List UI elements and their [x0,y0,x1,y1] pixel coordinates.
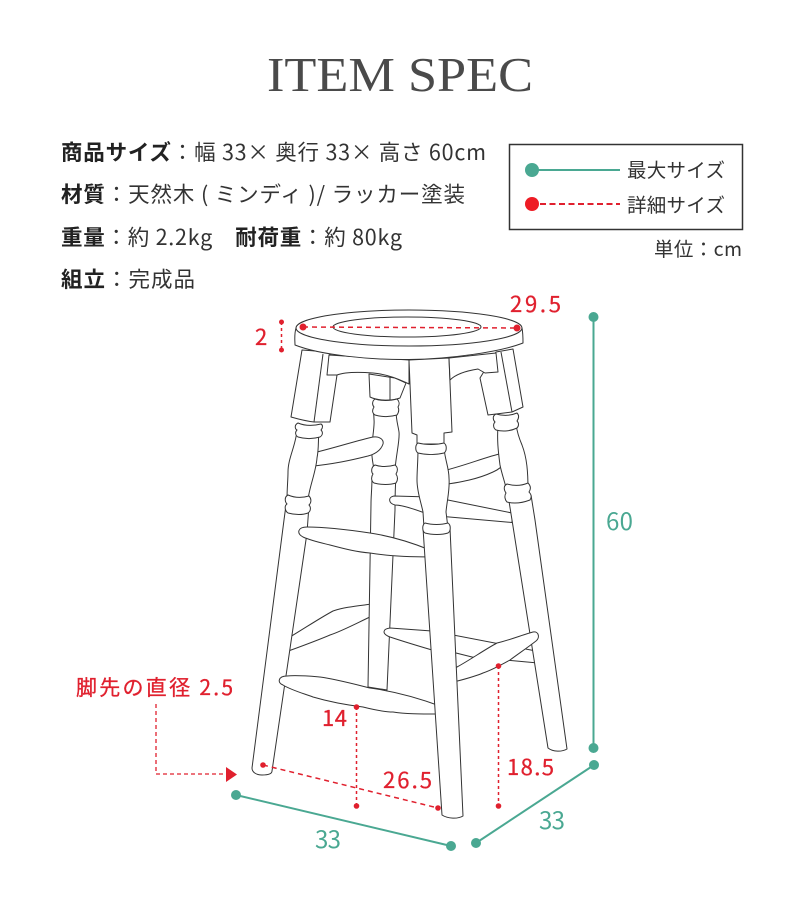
spec: assembly: 組立：完成品 [61,263,195,294]
red detail: lower front stretcher height [322,701,359,809]
apron right [449,353,498,380]
legend: detail size [525,189,725,218]
stool line drawing [252,310,567,818]
rear leg [368,374,406,690]
red detail: seat diameter: 29.5 [510,287,561,319]
back stretcher lower right [448,634,538,663]
unit note: 単位：cm [654,233,742,262]
red detail: seat diameter [300,287,561,332]
green max dimension: height [588,312,633,753]
legend box [510,144,742,230]
green max dimension: width [231,790,456,855]
legend: max size [525,154,725,183]
red detail: leg spacing: 26.5 [383,763,432,795]
left stretcher upper [305,437,383,467]
front centre leg rings [416,443,446,454]
red detail: leg spacing [260,762,441,811]
apron left [327,355,409,384]
red detail: right stretcher height [496,663,554,809]
spec: material: 材質：天然木 ( ミンディ )/ ラッカー塗装 [61,178,465,209]
front-left leg [252,350,337,775]
front stretcher mid [299,527,430,557]
inner stretcher upper [390,496,430,515]
left stretcher lower [283,604,372,653]
inner stretcher lower [384,628,432,650]
legend: max size: 最大サイズ [627,154,725,183]
spec: weight and load: 重量：約 2.2kg 耐荷重：約 80kg [61,221,402,252]
red detail: foot diameter callout: 脚先の直径 2.5 [76,672,233,702]
right leg [480,349,567,751]
red detail: lower front stretcher height: 14 [322,701,347,733]
red detail: right stretcher height: 18.5 [507,750,554,782]
spec text block [61,136,486,294]
right stretcher lower [450,632,538,683]
green max dimension: height: 60 [606,502,633,537]
green max dimension: depth [471,760,599,848]
front-left leg rings [295,423,322,438]
back stretcher upper right [438,498,512,522]
rear leg rings [372,465,398,484]
legend: detail size: 詳細サイズ [627,189,725,218]
stool seat [295,310,523,360]
red detail: seat thickness: 2 [255,320,267,352]
red detail: foot diameter callout [76,672,237,782]
green max dimension: depth: 33 [539,801,565,836]
right leg rings [493,413,518,431]
green max dimension: width: 33 [315,820,341,855]
right stretcher upper [435,453,509,486]
front stretcher lower [279,676,440,714]
title: ITEM SPEC [267,47,533,102]
front centre leg [409,358,463,818]
spec: product size: 商品サイズ：幅 33× 奥行 33× 高さ 60cm [61,136,486,167]
red detail: seat thickness [255,320,284,352]
